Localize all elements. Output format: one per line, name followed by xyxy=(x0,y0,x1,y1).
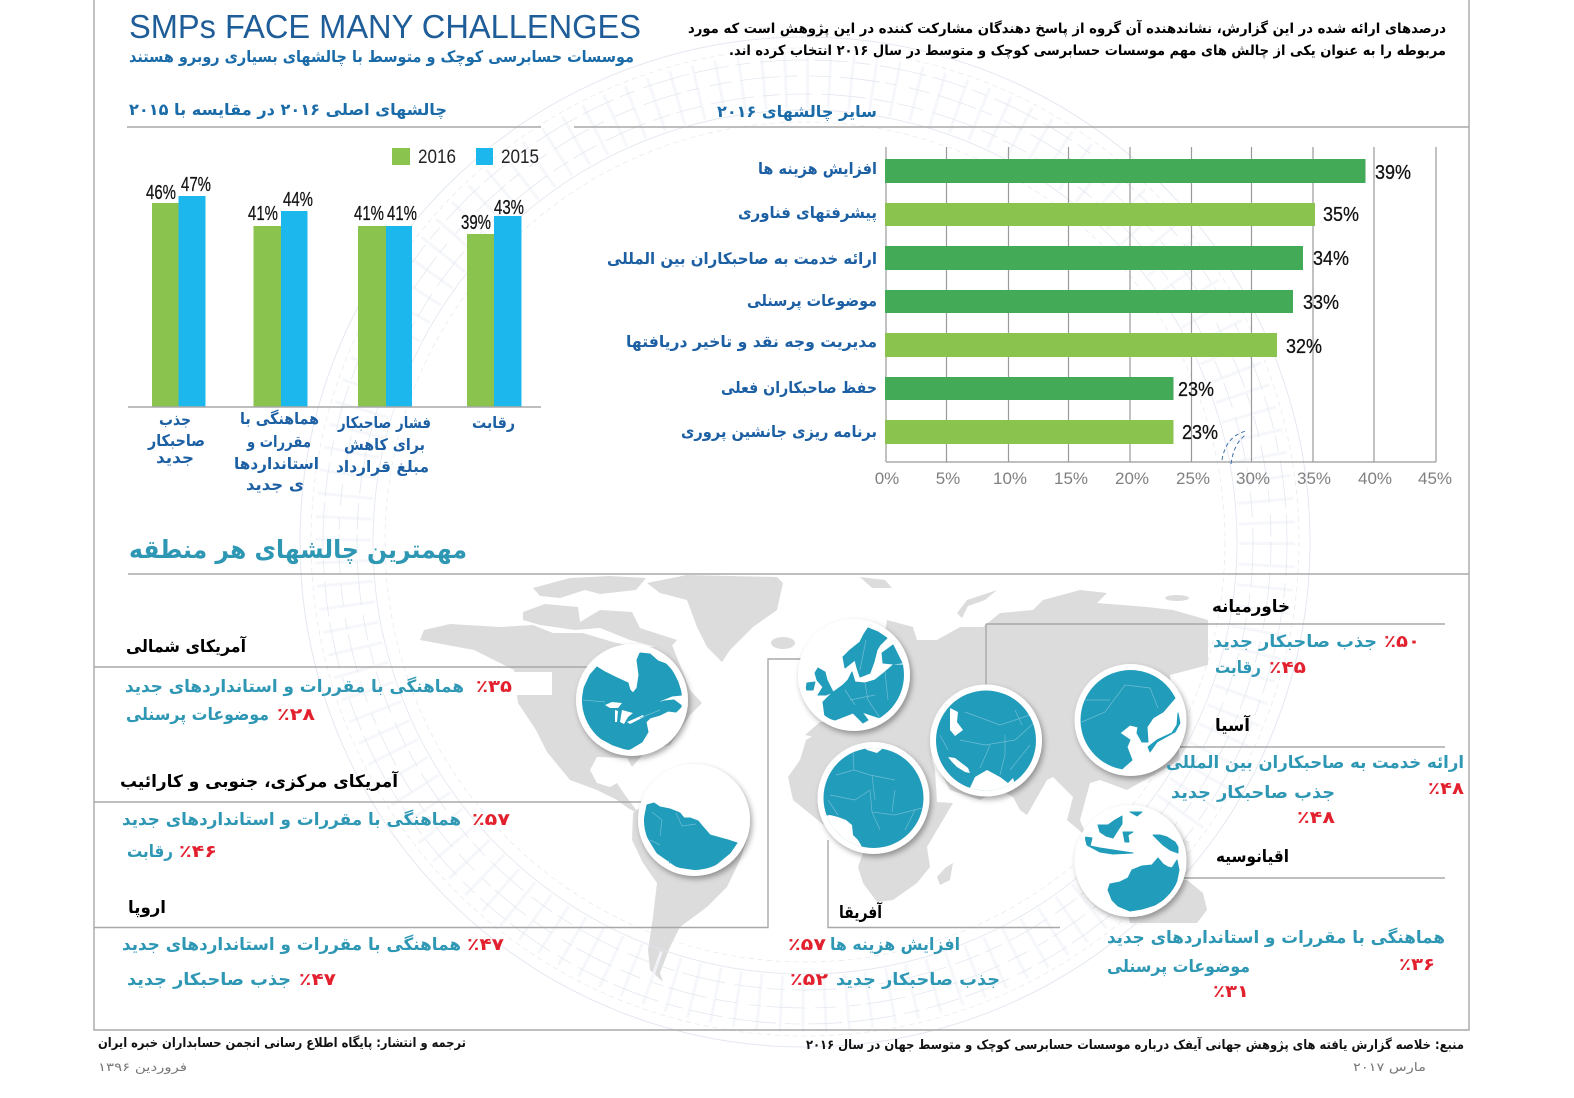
bars: fee pressure xyxy=(354,203,417,407)
region: Oceania xyxy=(1107,847,1445,1002)
legend: 2015 xyxy=(501,147,539,168)
category labels: ی جدید xyxy=(246,475,304,494)
region: Africa: ٪۵۷ xyxy=(788,935,827,955)
bars: competition: 43% xyxy=(494,197,524,219)
region: Oceania: موضوعات پرسنلی xyxy=(1107,957,1250,977)
axis labels: 20% xyxy=(1115,469,1149,488)
bars: regulatory compliance: 44% xyxy=(283,189,313,211)
bar: personnel xyxy=(747,290,1339,314)
region: Middle East: خاورمیانه xyxy=(1212,597,1290,617)
axis labels: 45% xyxy=(1418,469,1452,488)
region: Central, South America and Caribbean: رقابت xyxy=(127,842,173,862)
globe: Europe xyxy=(798,619,910,731)
axis labels: 30% xyxy=(1236,469,1270,488)
region: Middle East xyxy=(1212,597,1420,678)
bar: technology: پیشرفتهای فناوری xyxy=(738,203,877,223)
region: Middle East: ٪۴۵ xyxy=(1269,658,1306,678)
region: Central, South America and Caribbean: هماهنگی با مقررات و استانداردهای جدید xyxy=(122,809,461,830)
bar: succession planning: 23% xyxy=(1182,422,1218,444)
region: Europe: اروپا xyxy=(128,898,166,918)
region: Oceania: هماهنگی با مقررات و استانداردهای جدید xyxy=(1107,927,1445,948)
intro text: مربوطه را به عنوان یکی از چالش های مهم موسسات حسابرسی کوچک و متوسط در سال ۲۰۱۶ انتخاب کرده اند. xyxy=(729,43,1446,59)
footer: source: مارس ۲۰۱۷ xyxy=(1353,1060,1426,1075)
category labels: جدید xyxy=(156,448,194,467)
region: Africa: جذب صاحبکار جدید xyxy=(836,970,1000,990)
bar: technology xyxy=(738,203,1359,226)
globe: Asia xyxy=(1074,664,1186,776)
world map xyxy=(420,575,1208,982)
region: North America: هماهنگی با مقررات و استانداردهای جدید xyxy=(125,676,464,697)
category labels: هماهنگی با xyxy=(240,409,319,428)
region: Asia xyxy=(1166,714,1465,828)
region: Europe: ٪۴۷ xyxy=(467,935,505,955)
category labels xyxy=(147,409,515,494)
bars: fee pressure: 41% xyxy=(387,203,417,225)
footer: translation credit xyxy=(98,1035,466,1075)
bars: new client acquisition xyxy=(146,174,211,407)
region: Europe xyxy=(122,898,505,990)
region: Asia: جذب صاحبکار جدید xyxy=(1171,783,1335,803)
footer: source: منبع: خلاصه گزارش یافته های پژوهش جهانی آیفک درباره موسسات حسابرسی کوچک و متوسط جهان در سال ۲۰۱۶ xyxy=(806,1036,1464,1053)
category labels: استانداردها xyxy=(234,454,319,473)
bar: cash flow: 32% xyxy=(1286,336,1322,358)
footer: source xyxy=(806,1036,1464,1075)
bar: client retention xyxy=(721,377,1214,401)
bar: rising costs: 39% xyxy=(1375,162,1411,184)
bar: technology: 35% xyxy=(1323,204,1359,226)
region: Central, South America and Caribbean xyxy=(120,770,511,862)
bar: client retention: حفظ صاحبکاران فعلی xyxy=(721,378,877,397)
bar: rising costs xyxy=(758,159,1411,184)
axis labels: 0% xyxy=(875,469,899,488)
bars: competition: 39% xyxy=(461,212,491,234)
grid and axis xyxy=(886,147,1436,462)
bar: cash flow xyxy=(626,332,1322,358)
title: SMPs FACE MANY CHALLENGES xyxy=(129,8,641,45)
region: Europe: هماهنگی با مقررات و استانداردهای جدید xyxy=(122,934,461,955)
footer: translation credit: ترجمه و انتشار: پایگاه اطلاع رسانی انجمن حسابداران خبره ایران xyxy=(98,1035,466,1051)
region: North America: موضوعات پرسنلی xyxy=(126,705,269,725)
bars: fee pressure: 41% xyxy=(354,203,384,225)
region: North America: ٪۳۵ xyxy=(476,677,512,697)
bar: client retention: 23% xyxy=(1178,379,1214,401)
axis labels: 35% xyxy=(1297,469,1331,488)
footer: translation credit: فروردین ۱۳۹۶ xyxy=(98,1060,187,1075)
bars: new client acquisition: 47% xyxy=(181,174,211,196)
category labels: مبلغ قرارداد xyxy=(336,457,429,476)
category labels: رقابت xyxy=(472,413,515,432)
axis labels: 40% xyxy=(1358,469,1392,488)
white patch beside North America row xyxy=(512,672,552,695)
region: North America: ٪۲۸ xyxy=(277,705,316,725)
region: Central, South America and Caribbean: ٪۴۶ xyxy=(179,842,217,862)
globe: Africa xyxy=(815,742,930,860)
region: Africa: آفریقا xyxy=(839,901,883,923)
category labels: فشار صاحبکار xyxy=(337,413,431,432)
globe: South America xyxy=(638,764,750,876)
watermark seal xyxy=(300,37,1310,1047)
heading: other challenges: سایر چالشهای ۲۰۱۶ xyxy=(717,102,877,122)
category labels: برای کاهش xyxy=(344,435,425,454)
bars: regulatory compliance xyxy=(248,189,313,407)
axis labels: 25% xyxy=(1176,469,1210,488)
legend: 2016 xyxy=(418,147,456,168)
region: Asia: ٪۴۸ xyxy=(1297,808,1336,828)
region: Asia: آسیا xyxy=(1215,714,1251,736)
region: Central, South America and Caribbean: ٪۵۷ xyxy=(472,810,511,830)
region: Oceania: ٪۳۱ xyxy=(1213,982,1249,1002)
heading: top challenges per region: مهمترین چالشهای هر منطقه xyxy=(129,535,467,565)
axis labels: 15% xyxy=(1054,469,1088,488)
axis labels: 10% xyxy=(993,469,1027,488)
category labels: جذب xyxy=(159,410,191,429)
column chart: main challenges 2016 vs 2015 xyxy=(128,147,541,494)
intro text xyxy=(688,19,1446,59)
region: Africa: ٪۵۲ xyxy=(790,970,829,990)
globe: North America xyxy=(576,644,688,756)
subtitle: موسسات حسابرسی کوچک و متوسط با چالشهای بسیاری روبرو هستند xyxy=(129,47,634,67)
globe: Middle East xyxy=(930,684,1042,800)
region: North America: آمریکای شمالی xyxy=(126,635,247,657)
bar: rising costs: افزایش هزینه ها xyxy=(758,159,877,178)
bar: personnel: موضوعات پرسنلی xyxy=(747,291,877,311)
region: North America xyxy=(125,635,512,725)
bar: succession planning xyxy=(681,420,1218,444)
region: Asia: ارائه خدمت به صاحبکاران بین المللی xyxy=(1166,753,1464,773)
bars: new client acquisition: 46% xyxy=(146,182,176,204)
region: Middle East: ٪۵۰ xyxy=(1384,632,1420,652)
bar: personnel: 33% xyxy=(1303,292,1339,314)
bars: regulatory compliance: 41% xyxy=(248,203,278,225)
bar: international clients xyxy=(607,246,1349,270)
intro text: درصدهای ارائه شده در این گزارش، نشاندهنده آن گروه از پاسخ دهندگان مشارکت کننده در این پژوهش است که مورد xyxy=(688,19,1446,37)
region: Africa: افزایش هزینه ها xyxy=(830,935,960,955)
category labels: صاحبکار xyxy=(147,431,205,450)
region: Oceania: ٪۳۶ xyxy=(1399,955,1435,975)
bar chart: other challenges 2016 xyxy=(607,147,1452,488)
region: Middle East: رقابت xyxy=(1215,658,1261,678)
region: Central, South America and Caribbean: آمریکای مرکزی، جنوبی و کارائیب xyxy=(120,770,399,792)
region: Asia: ٪۴۸ xyxy=(1428,779,1465,799)
legend xyxy=(392,147,539,168)
region: Europe: جذب صاحبکار جدید xyxy=(127,970,291,990)
category labels: مقررات و xyxy=(246,432,311,451)
bar: international clients: 34% xyxy=(1313,248,1349,270)
bar: international clients: ارائه خدمت به صاحبکاران بین المللی xyxy=(607,249,877,268)
region: Middle East: جذب صاحبکار جدید xyxy=(1213,632,1377,652)
connector lines xyxy=(94,624,1445,928)
globe: Oceania xyxy=(1074,805,1186,917)
bar: succession planning: برنامه ریزی جانشین پروری xyxy=(681,422,877,442)
heading: main challenges: چالشهای اصلی ۲۰۱۶ در مقایسه با ۲۰۱۵ xyxy=(129,100,447,120)
axis labels: 5% xyxy=(936,469,960,488)
region: Africa xyxy=(788,901,1000,990)
bar: cash flow: مدیریت وجه نقد و تاخیر دریافتها xyxy=(626,332,877,351)
region: Europe: ٪۴۷ xyxy=(299,970,337,990)
axis labels xyxy=(875,469,1452,488)
bars: competition xyxy=(461,197,524,407)
region: Oceania: اقیانوسیه xyxy=(1216,847,1289,867)
